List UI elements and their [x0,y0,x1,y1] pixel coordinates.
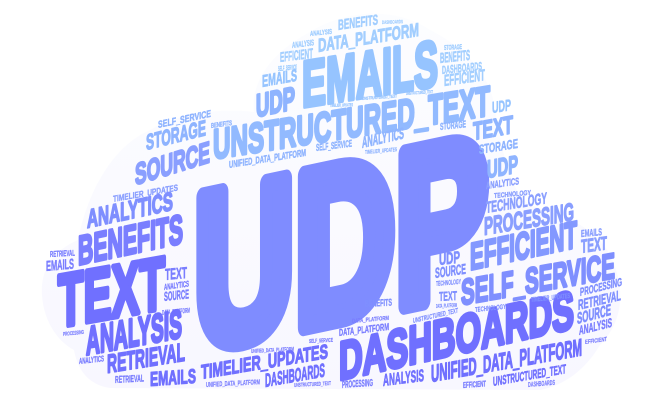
top cluster of words: ANALYSIS [310,29,332,38]
main word: UDP: UDP [194,90,488,397]
bottom center cluster of words: PROCESSING [342,378,373,391]
word: EMAILS lower: EMAILS [150,366,196,391]
right upper cluster of words: UDP [492,96,511,117]
top cluster of words: BENEFITS [440,48,470,67]
right lower cluster of words: RETRIEVAL [578,288,621,314]
right lower cluster of words: TECHNOLOGY [475,304,506,314]
left lower cluster of words: TEXT [165,264,187,284]
right upper cluster of words: EMAILS [581,227,602,240]
top cluster of words: EFFICIENT [280,45,313,65]
left lower cluster of words: RETRIEVAL [115,373,144,386]
center band of words above UDP [229,124,404,171]
bottom center cluster of words: UNIFIED_DATA_PLATFORM [206,379,260,389]
word: PROCESSING: PROCESSING [484,198,574,241]
bottom center cluster of words: UNSTRUCTURED_TEXT [493,361,566,389]
left lower cluster of words: SOURCE [164,286,189,304]
center band of words above UDP: UNIFIED_DATA_PLATFORM [229,148,306,171]
bottom center cluster of words: DASHBOARDS [528,380,555,389]
right upper cluster of words: ANALYTICS [486,176,519,192]
top cluster of words: EFFICIENT [444,66,485,90]
word: EMAILS: EMAILS [302,27,438,121]
right lower cluster of words: UNSTRUCTURED_TEXT [413,307,458,325]
top cluster of words: DASHBOARDS [442,61,482,77]
center band of words above UDP: SELF_SERVICE [316,139,352,154]
left lower cluster of words: DATA_PLATFORM [162,308,190,317]
top cluster of words: TIMELIER_UPDATES [330,102,353,108]
bottom center cluster of words: DASHBOARDS [265,361,325,392]
left lower cluster of words: ANALYTICS [79,353,104,366]
bottom center cluster of words: DATA_PLATFORM [352,316,389,325]
word: STORAGE: STORAGE [146,115,206,155]
bottom center cluster of words: UNIFIED_DATA_PLATFORM [251,347,294,355]
top cluster of words: UNSTRUCTURED_TEXT [406,89,433,96]
word: ANALYTICS: ANALYTICS [87,186,173,234]
right lower cluster of words: TIMELIER_UPDATES [531,293,570,304]
right upper cluster of words: TEXT [473,111,513,146]
right upper cluster of words: STORAGE [440,119,466,133]
word: BENEFITS: BENEFITS [78,205,183,274]
top cluster of words: EMAILS [262,65,297,91]
right lower cluster of words: SOURCE [435,262,466,282]
word: UDP small: UDP [256,80,295,124]
top cluster of words: STORAGE [444,44,462,52]
bottom center cluster of words: EFFICIENT [463,378,486,390]
right lower cluster of words [413,245,622,346]
bottom center cluster of words: SELF_SERVICE [309,338,333,345]
right upper cluster of words: STORAGE [479,136,518,157]
left lower cluster of words: ANALYTICS [164,279,189,292]
right upper cluster of words [440,96,607,279]
left upper cluster of words: TIMELIER_UPDATES [113,183,178,204]
word: DATA_PLATFORM: DATA_PLATFORM [318,20,419,57]
right lower cluster of words: TECHNOLOGY [436,279,461,288]
right lower cluster of words: TEXT [439,288,457,304]
top cluster of words: BENEFITS [338,12,378,34]
word: TIMELIER_UPDATES: TIMELIER_UPDATES [201,341,328,384]
right lower cluster of words: DATA_PLATFORM [436,303,457,310]
left upper cluster of words: BENEFITS [211,120,232,130]
right lower cluster of words: ANALYSIS [579,315,612,338]
left upper cluster of words: SELF_SERVICE [158,109,211,131]
bottom center cluster of words: UNSTRUCTURED_TEXT [294,381,331,389]
top cluster of words [213,12,490,168]
right lower cluster of words: UDP [439,248,460,269]
right lower cluster of words: PROCESSING [580,276,622,299]
left upper cluster of words [46,109,232,275]
top cluster of words: DASHBOARDS [382,19,403,26]
left lower cluster of words [58,241,196,391]
bottom center cluster of words: BENEFITS [365,298,392,310]
bottom center cluster of words: DATA_PLATFORM [339,322,389,339]
right lower cluster of words: EFFICIENT [585,337,607,346]
top cluster of words: UNSTRUCTURED_TEXT [362,94,397,101]
word: EFFICIENT: EFFICIENT [470,214,577,279]
right upper cluster of words: TECHNOLOGY [486,189,547,217]
left lower cluster of words: PROCESSING [63,330,84,338]
text: ANALYTICS [362,124,404,152]
center band of words above UDP: TIMELIER_UPDATES [365,147,397,156]
left upper cluster of words: RETRIEVAL [50,248,75,259]
bottom center cluster of words: ANALYSIS [383,366,424,390]
top cluster of words: SELF_SERVICE [278,64,297,73]
word: RETRIEVAL: RETRIEVAL [107,337,185,379]
right upper cluster of words: TECHNOLOGY [494,190,531,200]
word: SOURCE: SOURCE [135,135,210,192]
right lower cluster of words: SOURCE [577,301,611,328]
left upper cluster of words: EMAILS [46,257,74,275]
bottom center cluster of words [201,279,582,392]
left lower cluster of words: ANALYSIS [86,301,182,364]
right upper cluster of words: UDP [487,151,518,184]
word: TEXT big: TEXT [58,241,165,343]
right upper cluster of words: TEXT [581,233,607,258]
top cluster of words: ANALYSIS [292,37,314,50]
